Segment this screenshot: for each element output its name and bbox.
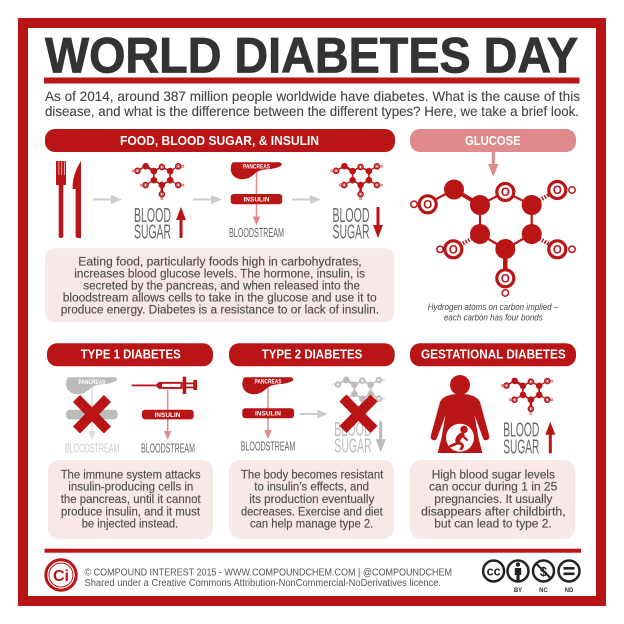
molecule: greyed glucose: O (361, 405, 364, 410)
credits text: © COMPOUND INTEREST 2015 - WWW.COMPOUNDCHEM.COM | @COMPOUNDCHEM (84, 567, 452, 578)
label: blood sugar down: SUGAR (332, 222, 370, 244)
molecule: glucose rising: O (144, 182, 147, 187)
logo: compound interest: Ci (53, 568, 69, 585)
molecule: glucose falling: O (335, 168, 338, 173)
text block: gestational explanation: pregnancies. It usually (434, 492, 553, 506)
molecule: glucose rising: O (136, 168, 139, 173)
molecule: glucose falling: O (343, 182, 346, 187)
panel: type 2 diabetes (229, 343, 395, 539)
text block: type 1 explanation: The immune system attacks (61, 467, 201, 481)
diagram: injected insulin (132, 377, 197, 455)
heading: food, blood sugar and insulin: FOOD, BLOOD SUGAR, & INSULIN (120, 133, 319, 148)
molecule: glucose structure: O (501, 187, 510, 199)
molecule: glucose rising: O (505, 383, 508, 388)
text block: type 1 explanation: produce insulin, and it must (61, 505, 201, 519)
molecule: glucose falling: O (375, 182, 379, 187)
molecule: glucose rising (501, 378, 553, 414)
arrow: insulin to lower blood sugar (292, 195, 321, 204)
diagram: failed pancreas: BLOODSTREAM (65, 440, 119, 455)
molecule: glucose falling: O (359, 164, 362, 169)
heading: type 1 diabetes (47, 343, 213, 366)
label: blood sugar up (134, 205, 186, 244)
molecule: greyed glucose: O (361, 378, 364, 383)
molecule: glucose structure: O (423, 199, 432, 211)
molecule: glucose rising: O (177, 182, 180, 187)
heading: food, blood sugar and insulin (45, 129, 395, 152)
heading: glucose: GLUCOSE (465, 133, 521, 148)
text block: gestational explanation: disappears after childbirth, (421, 505, 566, 519)
licence icons: cc (487, 564, 501, 578)
licence icons: ND (565, 588, 574, 594)
text block: type 2 explanation: to insulin’s effects, and (254, 480, 369, 494)
diagram: blocked blood sugar fall: BLOOD (334, 419, 372, 441)
molecule: glucose falling: O (375, 164, 379, 169)
caption: hydrogen atoms note (428, 302, 559, 324)
panel: glucose (410, 129, 576, 324)
molecule: glucose structure: O (553, 185, 562, 197)
text block: how insulin works: secreted by the pancreas, and when released into the (83, 278, 360, 292)
text block: how insulin works (45, 248, 394, 322)
molecule: glucose rising: O (546, 397, 549, 402)
molecule: glucose structure (411, 180, 575, 296)
molecule: glucose rising: O (160, 192, 163, 197)
icon: red cross (76, 398, 108, 430)
diagram: pancreas and insulin: BLOODSTREAM (241, 439, 295, 454)
label: blood sugar down (332, 205, 383, 244)
molecule: glucose rising: O (160, 164, 163, 169)
caption: hydrogen atoms note: Hydrogen atoms on carbon implied – (428, 302, 559, 313)
heading: glucose (410, 129, 576, 152)
label: blood sugar up: SUGAR (503, 436, 539, 458)
text block: type 2 explanation: The body becomes resistant (241, 467, 384, 481)
label: blood sugar up: BLOOD (503, 420, 539, 442)
text block: type 1 explanation: the pancreas, until it cannot (61, 492, 201, 506)
intro text: As of 2014, around 387 million people worldwide have diabetes. What is the cause of this (45, 88, 580, 104)
diagram: blocked blood sugar fall: SUGAR (334, 436, 372, 458)
molecule: glucose structure: O (449, 244, 458, 256)
arrow: blood sugar to pancreas (193, 195, 222, 204)
molecule: glucose structure: O (553, 244, 562, 256)
diagram: pancreas and insulin: PANCREAS (254, 379, 282, 386)
diagram: blocked blood sugar fall (333, 377, 386, 458)
molecule: greyed glucose: O (377, 396, 380, 401)
molecule: glucose falling: O (359, 192, 362, 197)
arrow: insulin to blocked glucose (299, 410, 328, 418)
intro text (45, 88, 580, 119)
label: blood sugar up: BLOOD (134, 205, 171, 227)
icon: fork and knife (56, 161, 81, 238)
text block: gestational explanation: but can lead to type 2. (434, 517, 552, 531)
text block: how insulin works: increases blood glucose levels. The hormone, insulin, is (74, 266, 365, 280)
text block: type 1 explanation (48, 460, 213, 539)
text block: type 1 explanation: be injected instead. (82, 517, 178, 531)
panel: food, blood sugar and insulin (45, 129, 395, 322)
molecule: glucose rising: O (546, 378, 549, 383)
text block: how insulin works: Eating food, particularly foods high in carbohydrates, (78, 255, 362, 269)
heading: gestational diabetes (410, 343, 576, 366)
diagram: pancreas and insulin (241, 377, 295, 454)
licence icons: $ (540, 564, 548, 579)
molecule: greyed glucose: O (344, 396, 348, 401)
panel: type 1 diabetes (47, 343, 213, 539)
diagram: failed pancreas (65, 377, 119, 455)
panel: gestational diabetes (410, 343, 576, 539)
logo: compound interest (46, 560, 76, 590)
text block: type 1 explanation: insulin-producing cells in (68, 480, 193, 494)
text block: how insulin works: bloodstream allows cells to take in the glucose and use it to (63, 290, 377, 304)
footer (44, 549, 581, 594)
diagram: pancreas releases insulin: BLOODSTREAM (229, 225, 284, 240)
text block: gestational explanation: can occur during 1 in 25 (429, 480, 558, 494)
molecule: glucose rising: O (513, 397, 516, 402)
heading: type 2 diabetes: TYPE 2 DIABETES (262, 346, 363, 361)
diagram: injected insulin: INSULIN (154, 412, 181, 419)
diagram: failed pancreas: PANCREAS (78, 379, 106, 386)
molecule: greyed glucose: O (377, 377, 380, 382)
icon: pregnant woman (431, 375, 489, 453)
icon: red cross (343, 398, 374, 430)
label: blood sugar up: SUGAR (134, 222, 171, 244)
heading: type 2 diabetes (229, 343, 395, 366)
heading: type 1 diabetes: TYPE 1 DIABETES (81, 346, 181, 361)
diagram: pancreas releases insulin: INSULIN (244, 197, 270, 204)
molecule: glucose rising: O (529, 406, 532, 411)
text block: type 2 explanation: decreases. Exercise and diet (241, 505, 383, 519)
diagram: injected insulin: BLOODSTREAM (141, 440, 195, 455)
licence icons: BY (514, 588, 522, 594)
credits text (84, 567, 452, 589)
diagram: pancreas and insulin: INSULIN (255, 411, 281, 418)
licence icons (483, 560, 580, 594)
icon: baby (450, 426, 468, 449)
caption: hydrogen atoms note: each carbon has four bonds (444, 312, 543, 324)
molecule: greyed glucose: O (336, 382, 340, 387)
heading: gestational diabetes: GESTATIONAL DIABETES (421, 346, 566, 361)
text block: type 2 explanation: can help manage type 2. (250, 517, 373, 531)
diagram: pancreas releases insulin (229, 162, 284, 240)
molecule: glucose falling (331, 163, 383, 200)
molecule: glucose rising: O (177, 164, 180, 169)
text block: how insulin works: produce energy. Diabetes is a resistance to or lack of insulin. (61, 303, 379, 317)
label: blood sugar down: BLOOD (332, 205, 370, 227)
credits text: Shared under a Creative Commons Attribution-NonCommercial-NoDerivatives licence. (84, 578, 441, 589)
text block: type 2 explanation (229, 460, 394, 539)
text block: gestational explanation: High blood sugar levels (432, 467, 555, 481)
icon: syringe (132, 377, 197, 394)
molecule: greyed glucose (333, 377, 384, 413)
arrow: glucose to molecule (488, 152, 498, 177)
title: WORLD DIABETES DAY (45, 27, 578, 83)
intro text: disease, and what is the difference between the different types? Here, we take a brief look. (45, 103, 579, 119)
diagram: pancreas releases insulin: PANCREAS (243, 164, 270, 170)
molecule: glucose structure: O (501, 273, 510, 285)
molecule: glucose rising (132, 163, 184, 200)
molecule: glucose rising: O (529, 379, 532, 384)
arrow: food to blood sugar (93, 195, 122, 204)
licence icons: NC (539, 588, 548, 594)
text block: type 2 explanation: its production eventually (249, 492, 375, 506)
label: blood sugar up (503, 420, 555, 458)
text block: gestational explanation (410, 460, 575, 539)
